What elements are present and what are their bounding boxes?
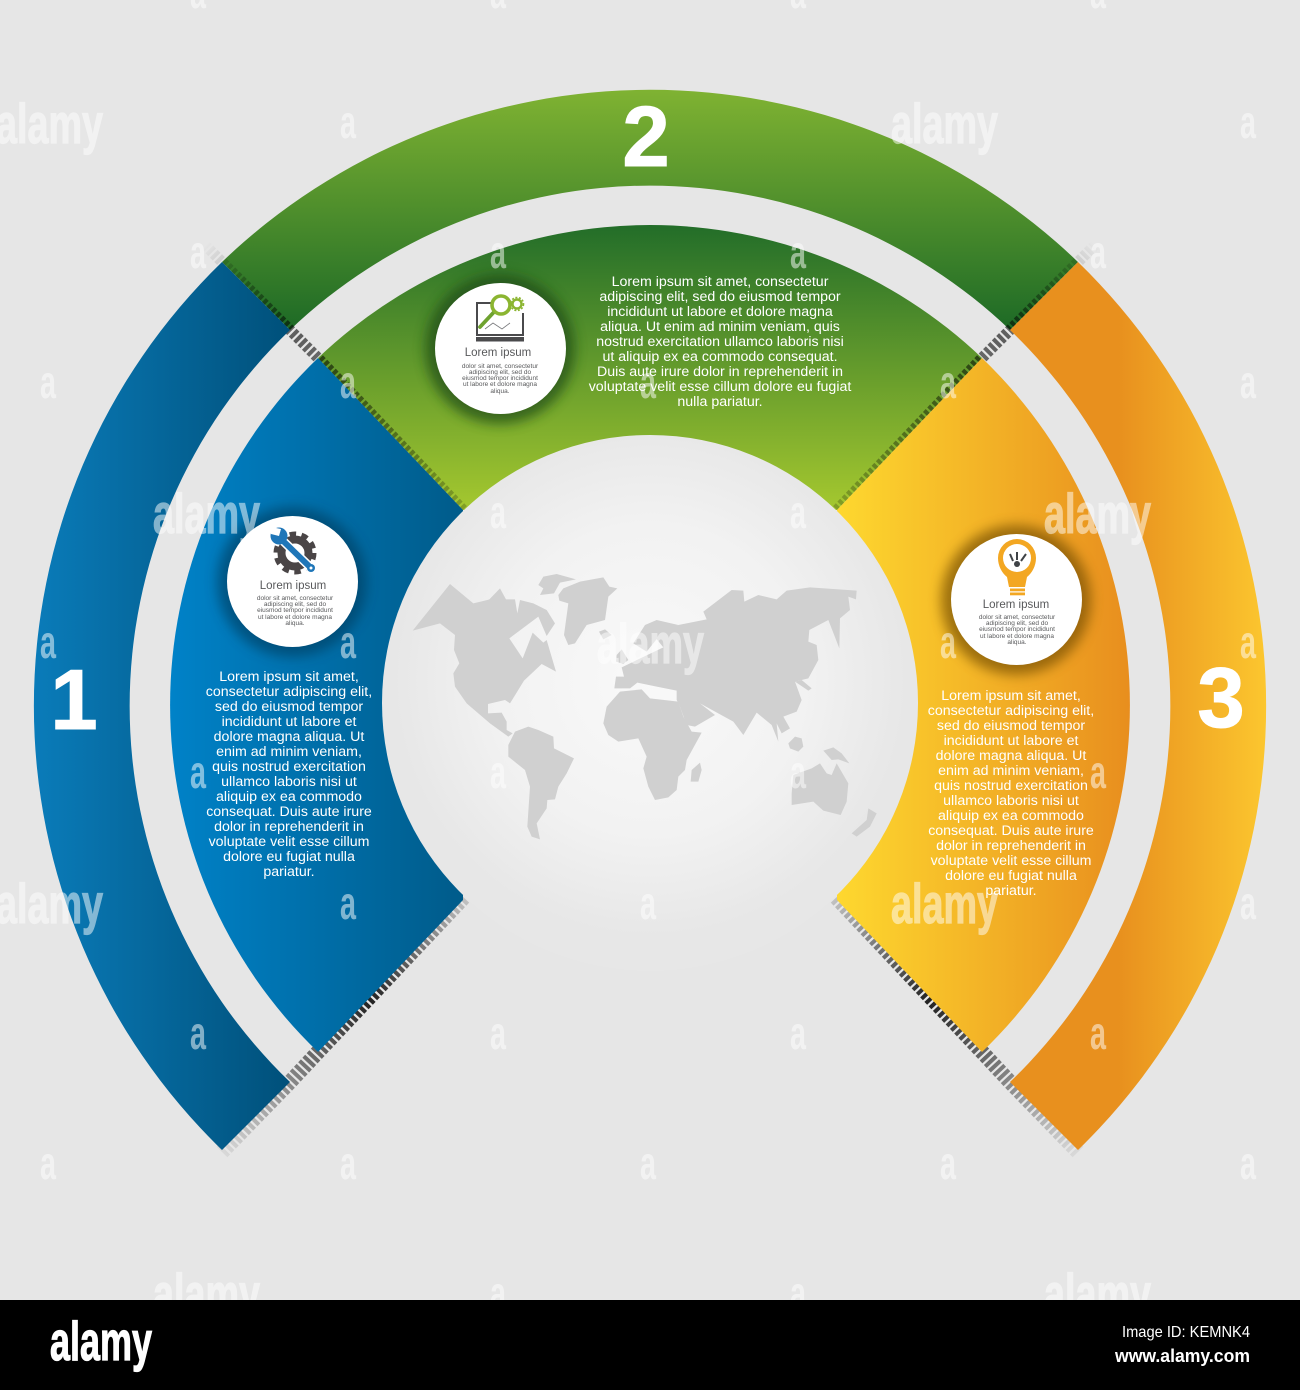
badge: step 1: Lorem ipsum [260,580,326,592]
text block: step 3: ullamco laboris nisi ut [943,793,1079,809]
watermarks: a [790,486,806,538]
text block: step 3: pariatur. [985,883,1037,899]
text block: step 1: quis nostrud exercitation [212,759,366,775]
text block: step 1: consequat. Duis aute irure [206,804,372,820]
watermarks: a [340,1137,356,1189]
South America [508,727,574,839]
text block: step 3 [928,688,1094,899]
watermarks: alamy [1044,1262,1151,1325]
Japan [795,680,812,691]
small text: dolor sit amet, consectetur [462,363,539,370]
small text: aliqua. [1007,639,1027,646]
watermarks: a [1240,1137,1256,1189]
watermarks: a [640,356,656,408]
watermarks: alamy [153,1262,260,1325]
Australia [792,763,848,815]
watermarks: a [940,356,956,408]
text block: step 1: dolore magna aliqua. Ut [214,729,364,745]
icon: light bulb [998,539,1036,595]
text block: step 3: consectetur adipiscing elit, [928,703,1094,719]
watermarks: a [40,1137,56,1189]
edge shadows [205,245,1095,1152]
Africa [603,689,702,800]
central globe circle [382,435,918,971]
badge: step 1 [217,507,367,657]
text block: step 3: voluptate velit esse cillum [931,853,1091,869]
watermarks: alamy [153,482,260,545]
watermarks: a [340,96,356,148]
text block: step 2: nostrud exercitation ullamco laboris nisi [596,334,844,350]
number 2: 2 [622,90,670,185]
text block: step 1 [206,669,372,880]
number 3: 3 [1197,651,1245,746]
watermarks: a [940,1137,956,1189]
panel: step 2 inner sector [318,225,982,510]
image id: Image ID: KEMNK4 [1122,1324,1250,1341]
small text: adipiscing elit, sed do [986,620,1048,627]
footer logo: alamy [50,1310,152,1372]
badge: step 2 [425,274,575,424]
small text: aliqua. [285,620,305,627]
watermarks: a [640,1137,656,1189]
small text: ut labore et dolore magna [258,614,332,621]
text block: step 3: quis nostrud exercitation [934,778,1088,794]
website: www.alamy.com [1114,1346,1250,1366]
North America [413,584,556,737]
text block: step 3: dolor in reprehenderit in [936,838,1086,854]
New Zealand [852,808,877,837]
watermarks: alamy [597,612,704,675]
text block: step 3: sed do eiusmod tempor [937,718,1085,734]
watermarks: a [190,1007,206,1059]
small text: dolor sit amet, consectetur [257,595,334,602]
New Guinea [823,747,849,763]
watermarks: a [40,356,56,408]
text block: step 3: dolore eu fugiat nulla [945,868,1077,884]
text block: step 1: Lorem ipsum sit amet, [219,669,359,685]
small text: ut labore et dolore magna [980,633,1054,640]
Scandinavia [633,620,678,652]
text block: step 1: pariatur. [263,864,315,880]
Borneo [788,737,803,752]
text block: step 2: aliqua. Ut enim ad minim veniam, quis [600,319,840,335]
text block: step 1: voluptate velit esse cillum [209,834,369,850]
world map [413,574,877,839]
text block: step 3: dolore magna aliqua. Ut [936,748,1086,764]
badge: step 2: Lorem ipsum [465,347,531,359]
text block: step 2: incididunt ut labore et dolore magna [607,304,833,320]
watermarks: a [490,1267,506,1319]
Iceland [599,629,612,639]
small text: eiusmod tempor incididunt [257,607,333,614]
watermarks: a [640,877,656,929]
text block: step 3: aliquip ex ea commodo [938,808,1084,824]
text block: step 3: incididunt ut labore et [944,733,1078,749]
watermarks: a [940,616,956,668]
small text [979,614,1056,646]
panel: step 1 outer ring [34,262,290,1150]
text block: step 2: Lorem ipsum sit amet, consectetur [612,274,829,290]
watermarks: a [40,616,56,668]
watermarks: a [1240,616,1256,668]
text block: step 2: Duis aute irure dolor in reprehenderit in [597,364,843,380]
panel: step 3 outer ring [1010,262,1266,1150]
Arctic island [538,574,576,595]
Madagascar [691,763,702,782]
watermarks: a [490,1007,506,1059]
text block: step 2: adipiscing elit, sed do eiusmod tempor [599,289,841,305]
watermarks: a [490,226,506,278]
watermarks: a [790,226,806,278]
small text: adipiscing elit, sed do [469,369,531,376]
panel: step 3 inner sector [837,358,1130,1052]
small text [462,363,539,395]
watermarks: a [340,877,356,929]
watermarks: alamy [891,872,998,935]
text block: step 3: Lorem ipsum sit amet, [941,688,1081,704]
text block: step 3: enim ad minim veniam, [938,763,1084,779]
small text: dolor sit amet, consectetur [979,614,1056,621]
small text: adipiscing elit, sed do [264,601,326,608]
Eurasia [614,587,857,742]
watermarks: a [1240,96,1256,148]
watermarks: a [1090,1007,1106,1059]
watermarks: a [490,486,506,538]
text block: step 2: voluptate velit esse cillum dolore eu fugiat [589,379,851,395]
badge: step 3 [941,525,1091,675]
watermarks: a [340,356,356,408]
text block: step 3: consequat. Duis aute irure [928,823,1094,839]
watermarks: a [490,746,506,798]
text block: step 2: ut aliquip ex ea commodo consequat. [602,349,838,365]
text block: step 2 [589,274,851,410]
footer bar [0,1300,1300,1390]
icon: laptop with magnifier and gear [476,296,524,342]
watermarks: a [1240,356,1256,408]
text block: step 2: nulla pariatur. [677,394,763,410]
small text [257,595,334,627]
watermarks: a [790,746,806,798]
text block: step 1: consectetur adipiscing elit, [206,684,372,700]
watermarks: a [1090,746,1106,798]
text block: step 1: dolore eu fugiat nulla [223,849,355,865]
watermarks: a [340,616,356,668]
small text: ut labore et dolore magna [463,381,537,388]
Britain [616,649,628,664]
panel: step 2 outer ring [222,90,1078,330]
text block: step 1: aliquip ex ea commodo [216,789,362,805]
watermarks: alamy [891,92,998,155]
badge: step 3: Lorem ipsum [983,599,1049,611]
watermarks: a [790,1007,806,1059]
small text: eiusmod tempor incididunt [979,626,1055,633]
icon: wrench and gear [270,527,315,572]
watermarks: a [790,1267,806,1319]
small text: eiusmod tempor incididunt [462,375,538,382]
small text: aliqua. [490,388,510,395]
text block: step 1: sed do eiusmod tempor [215,699,363,715]
text block: step 1: dolor in reprehenderit in [214,819,364,835]
watermarks: a [190,226,206,278]
watermarks: alamy [0,872,103,935]
panel: step 1 inner sector [170,358,463,1052]
Greenland [558,577,617,645]
watermarks: a [1090,226,1106,278]
text block: step 1: incididunt ut labore et [222,714,356,730]
text block: step 1: enim ad minim veniam, [216,744,362,760]
text block: step 1: ullamco laboris nisi ut [221,774,357,790]
number 1: 1 [50,653,98,748]
watermarks: alamy [0,92,103,155]
watermarks: alamy [1044,482,1151,545]
watermarks: a [190,746,206,798]
watermarks: a [1240,877,1256,929]
